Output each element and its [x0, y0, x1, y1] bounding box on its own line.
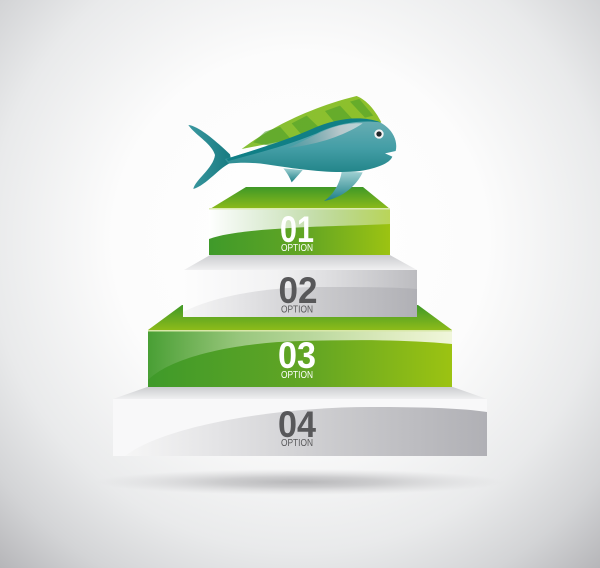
body sheen	[287, 123, 363, 148]
pectoral fin	[324, 172, 363, 201]
tail	[188, 125, 232, 189]
step 03	[148, 305, 452, 387]
back stripe	[227, 118, 381, 161]
number 02: 02	[278, 270, 318, 311]
eye	[374, 129, 384, 139]
step 01	[209, 187, 390, 255]
step 02	[183, 254, 417, 317]
dorsal fin	[242, 96, 381, 149]
label option: OPTION	[281, 438, 313, 449]
icon: fish	[188, 96, 396, 201]
number 03: 03	[278, 335, 316, 376]
ventral fin	[283, 168, 303, 182]
step 04	[113, 386, 487, 456]
body	[225, 119, 396, 172]
number 04: 04	[278, 404, 316, 445]
label option: OPTION	[281, 370, 313, 381]
label option: OPTION	[281, 304, 313, 316]
label option: OPTION	[281, 243, 313, 254]
ground shadow	[95, 469, 505, 495]
number 01: 01	[280, 209, 314, 250]
